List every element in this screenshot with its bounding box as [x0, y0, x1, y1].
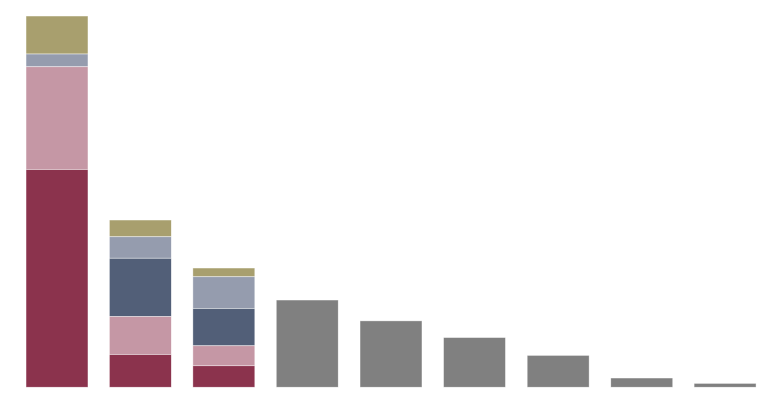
bar 3: stacked — [193, 268, 255, 387]
bar 1: stacked — [26, 16, 88, 387]
bar 9: grey — [694, 383, 756, 387]
bar 4: grey — [276, 300, 338, 387]
bar 2: stacked — [109, 220, 171, 387]
bar 8: grey — [611, 378, 673, 387]
bar 5: grey — [360, 321, 422, 387]
bar 7: grey — [527, 355, 589, 387]
bar 6: grey — [444, 338, 506, 387]
